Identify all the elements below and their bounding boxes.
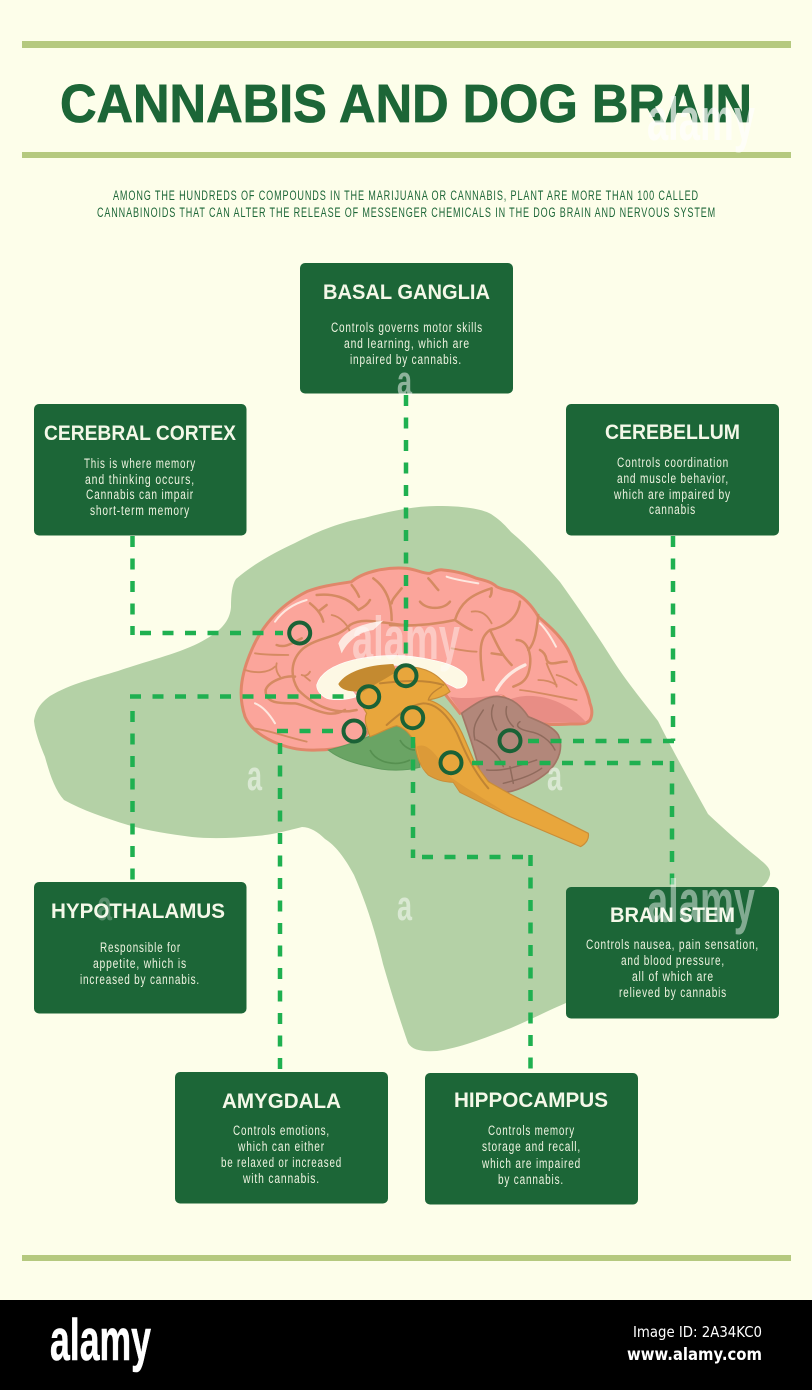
footer logo: alamy xyxy=(50,1308,151,1373)
title: CANNABIS AND DOG BRAIN xyxy=(60,74,752,134)
panel: cerebral cortex: This is where memory xyxy=(84,456,196,471)
panel: cerebral cortex xyxy=(34,404,246,536)
panel: cerebellum: and muscle behavior, xyxy=(617,471,729,486)
cerebellum folds xyxy=(474,705,555,783)
panel: brain stem: relieved by cannabis xyxy=(619,985,727,1000)
panel: amygdala: Controls emotions, xyxy=(233,1123,330,1138)
connector: cerebral cortex xyxy=(132,536,283,635)
panel: cerebral cortex: Cannabis can impair xyxy=(86,487,194,502)
green structure xyxy=(328,725,420,770)
panel: cerebellum: cannabis xyxy=(649,502,696,517)
brain stem shading xyxy=(417,746,510,815)
panel: hippocampus: which are impaired xyxy=(481,1156,581,1171)
connector: basal ganglia xyxy=(404,395,408,665)
panel: hypothalamus: Responsible for xyxy=(100,940,181,955)
footer url: www.alamy.com xyxy=(627,1345,762,1365)
watermarks xyxy=(97,86,755,935)
panel: brain stem: and blood pressure, xyxy=(621,953,725,968)
panel: brain stem: all of which are xyxy=(632,969,714,984)
panel: cerebellum: which are impaired by xyxy=(613,487,731,502)
dog head silhouette xyxy=(34,506,770,1051)
panel: cerebellum: CEREBELLUM xyxy=(605,421,740,444)
connector: cerebellum xyxy=(528,536,675,741)
parietal and occipital folds xyxy=(390,578,577,700)
panel: amygdala: which can either xyxy=(237,1139,325,1154)
brain stem xyxy=(357,667,589,847)
panel: cerebral cortex: CEREBRAL CORTEX xyxy=(44,422,236,445)
connector: amygdala xyxy=(277,731,333,1070)
watermarks: a xyxy=(247,752,262,799)
watermarks: alamy xyxy=(352,605,460,672)
cerebellum xyxy=(462,696,561,792)
panel: basal ganglia: Controls governs motor skills xyxy=(331,320,483,335)
brain highlights xyxy=(255,577,556,723)
pale arch above corpus callosum xyxy=(338,621,383,653)
intro text xyxy=(97,188,716,220)
panel: brain stem: Controls nausea, pain sensation, xyxy=(586,937,759,952)
brain stem folds xyxy=(380,681,488,788)
panel: basal ganglia: inpaired by cannabis. xyxy=(350,352,462,367)
panel: cerebellum xyxy=(566,404,779,536)
connector: hypothalamus xyxy=(130,696,346,880)
panel: hypothalamus: appetite, which is xyxy=(93,956,187,971)
panel: amygdala: with cannabis. xyxy=(242,1171,320,1186)
brain illustration xyxy=(241,568,592,847)
panel: hippocampus: storage and recall, xyxy=(482,1139,581,1154)
panel: cerebral cortex: and thinking occurs, xyxy=(85,472,195,487)
caudate xyxy=(338,664,397,692)
watermarks: a xyxy=(397,882,412,929)
panel: hippocampus: by cannabis. xyxy=(498,1172,564,1187)
panel: hypothalamus xyxy=(34,882,246,1014)
watermarks: a xyxy=(547,752,562,799)
panel: cerebellum: Controls coordination xyxy=(617,455,729,470)
panel: brain stem: BRAIN STEM xyxy=(610,904,735,927)
panel: hippocampus: HIPPOCAMPUS xyxy=(454,1089,608,1112)
panel: basal ganglia: BASAL GANGLIA xyxy=(323,281,490,304)
panel: hypothalamus: HYPOTHALAMUS xyxy=(51,900,225,923)
panel: amygdala xyxy=(175,1072,388,1204)
panel: basal ganglia: and learning, which are xyxy=(344,336,470,351)
panel: hypothalamus: increased by cannabis. xyxy=(80,972,200,987)
frontal lobe folds xyxy=(245,578,405,742)
connector: brain stem xyxy=(472,761,672,885)
footer bar xyxy=(0,1300,812,1390)
region markers xyxy=(289,622,520,773)
connector: hippocampus xyxy=(413,737,532,1070)
footer image id: Image ID: 2A34KC0 xyxy=(633,1323,762,1341)
panel: amygdala: AMYGDALA xyxy=(222,1090,341,1113)
panel: basal ganglia xyxy=(300,263,513,394)
panel: hippocampus: Controls memory xyxy=(488,1123,575,1138)
panel: amygdala: be relaxed or increased xyxy=(221,1155,342,1170)
panel: hippocampus xyxy=(425,1073,638,1204)
watermarks: a xyxy=(397,357,412,404)
watermarks: a xyxy=(97,882,112,929)
panel: cerebral cortex: short-term memory xyxy=(90,503,190,518)
green structure folds xyxy=(370,740,415,763)
cerebrum lower shading xyxy=(450,694,587,723)
corpus callosum xyxy=(317,655,467,700)
cerebrum xyxy=(241,568,592,750)
panel: brain stem xyxy=(566,887,779,1018)
